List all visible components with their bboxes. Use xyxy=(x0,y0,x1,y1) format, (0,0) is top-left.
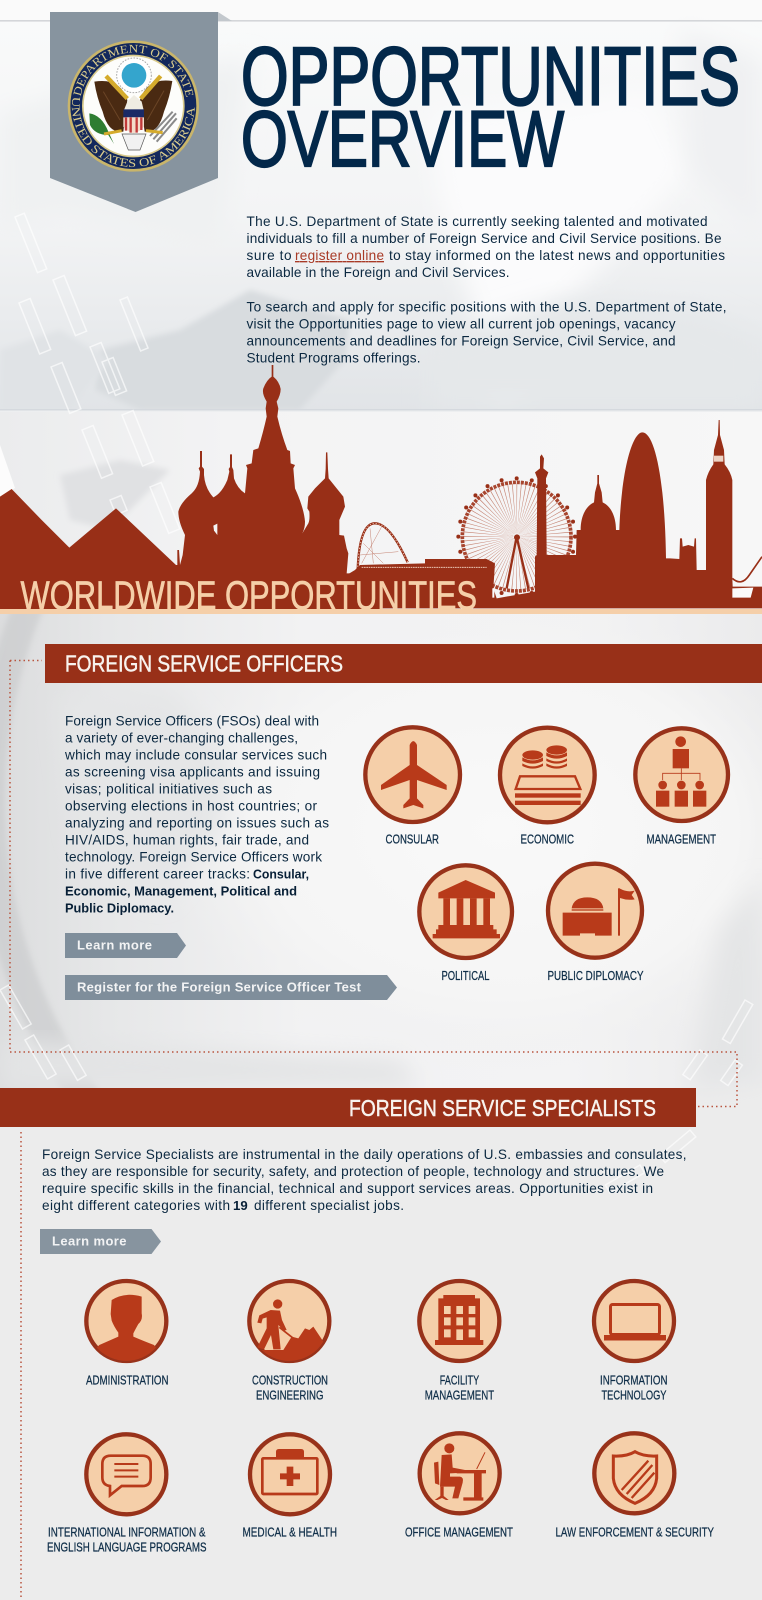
text block: officers description: visas; political initiatives such as xyxy=(65,782,272,796)
text block: officers description: Foreign Service Officers (FSOs) deal with xyxy=(65,714,319,728)
button: register for test: Register for the Foreign Service Officer Test xyxy=(77,980,362,994)
officer career track icons xyxy=(365,727,728,958)
icon: office management xyxy=(420,1433,500,1513)
background: map texture xyxy=(0,0,762,1194)
text block: officers description: a variety of ever-changing challenges, xyxy=(65,730,298,746)
specialist labels row two: INTERNATIONAL INFORMATION & xyxy=(48,1524,206,1540)
icon labels: officer tracks: ECONOMIC xyxy=(520,832,574,846)
seal: Department of State: UNITED STATES OF AMERICA xyxy=(72,97,195,168)
heading bar: specialists xyxy=(0,1088,696,1127)
text block: specialists description: different specialist jobs. xyxy=(254,1198,404,1213)
peach divider band xyxy=(0,609,762,614)
icon labels: officer tracks: PUBLIC DIPLOMACY xyxy=(548,968,644,983)
skyline illustration xyxy=(0,365,762,614)
icon: administration xyxy=(86,1281,166,1361)
text block: officers description: which may include consular services such xyxy=(64,748,327,762)
seal: Department of State: DEPARTMENT OF STATE xyxy=(73,44,194,97)
skyline: London xyxy=(340,420,762,608)
text block: introduction: individuals to fill a number of Foreign Service and Civil Service positions. Be xyxy=(246,231,722,246)
stadium arch xyxy=(358,523,408,570)
icon: public diplomacy xyxy=(548,864,642,958)
icon: international information xyxy=(86,1434,166,1514)
icon: facility management xyxy=(419,1281,499,1361)
heading: worldwide opportunities: WORLDWIDE OPPORTUNITIES xyxy=(20,574,477,618)
text block: introduction: sure to xyxy=(246,248,292,263)
icon: law enforcement and security xyxy=(594,1433,674,1513)
icon labels: officer tracks: POLITICAL xyxy=(442,968,490,983)
text block: introduction: announcements and deadlines for Foreign Service, Civil Service, and xyxy=(246,334,676,348)
icon: management xyxy=(635,728,728,821)
text block: introduction: available in the Foreign and Civil Services. xyxy=(246,265,510,280)
text block: specialists description: Foreign Service Specialists are instrumental in the daily operations of U.S. embassies and consulates, xyxy=(42,1147,686,1162)
dotted connector: specialists section xyxy=(20,1132,22,1600)
specialist labels row two: MEDICAL & HEALTH xyxy=(242,1524,337,1540)
text block: officers description: HIV/AIDS, human rights, fair trade, and xyxy=(65,832,309,848)
specialist labels row one: MANAGEMENT xyxy=(425,1388,494,1402)
text block: introduction: Student Programs offerings. xyxy=(246,350,420,366)
text block: introduction: visit the Opportunities page to view all current job openings, vacancy xyxy=(246,316,676,332)
heading bar: officers: FOREIGN SERVICE OFFICERS xyxy=(65,650,343,676)
banner with department seal xyxy=(50,12,232,212)
specialist icons row one xyxy=(86,1281,674,1361)
skyline: Moscow and pyramids xyxy=(0,365,380,610)
icon: information technology xyxy=(594,1281,674,1361)
text block: specialists description: eight different categories with xyxy=(42,1198,230,1213)
text block: introduction: register online xyxy=(295,248,384,263)
text block: officers description: Economic, Management, Political and xyxy=(65,884,297,898)
icon labels: officer tracks xyxy=(386,832,716,983)
specialist labels row one: INFORMATION xyxy=(600,1372,668,1388)
text block: officers description: observing elections in host countries; or xyxy=(65,798,317,814)
text block: officers description: as screening visa applicants and issuing xyxy=(65,764,320,780)
text block: specialists description: as they are responsible for security, safety, and protection of people, technology and structures. We xyxy=(42,1164,664,1179)
button: learn more: Learn more xyxy=(52,1234,126,1248)
panel: foreign service specialists xyxy=(0,1088,714,1554)
button: learn more xyxy=(40,1229,161,1254)
icon labels: officer tracks: CONSULAR xyxy=(386,832,439,846)
panel: foreign service officers xyxy=(45,644,762,1000)
ferris wheel xyxy=(458,478,575,595)
specialist labels row one: ENGINEERING xyxy=(256,1388,324,1402)
text block: specialists description xyxy=(42,1147,686,1213)
text block: introduction: to stay informed on the latest news and opportunities xyxy=(389,248,725,263)
specialist labels row two xyxy=(47,1524,714,1554)
button: learn more xyxy=(65,933,186,958)
text block: specialists description: require specific skills in the financial, technical and support services areas. Opportunities exist in xyxy=(42,1181,653,1196)
icon: consular xyxy=(365,727,460,822)
icon: construction engineering xyxy=(249,1281,329,1361)
text block: introduction: To search and apply for specific positions with the U.S. Department of State, xyxy=(246,300,726,314)
specialist labels row two: OFFICE MANAGEMENT xyxy=(405,1524,513,1540)
dotted connector: officers section xyxy=(10,660,737,1106)
text block: officers description: Consular, xyxy=(253,866,309,882)
text block: specialists description: 19 xyxy=(233,1198,248,1213)
icon: medical and health xyxy=(250,1434,330,1514)
icon labels: officer tracks: MANAGEMENT xyxy=(646,832,716,846)
specialist icons row two xyxy=(86,1433,674,1514)
specialist labels row one: TECHNOLOGY xyxy=(602,1388,667,1402)
specialist labels row one xyxy=(86,1372,668,1402)
heading bar: officers xyxy=(45,644,762,683)
text block: officers description: in five different career tracks: xyxy=(65,866,250,882)
specialist labels row one: ADMINISTRATION xyxy=(86,1372,168,1388)
button: learn more: Learn more xyxy=(77,938,152,952)
specialist labels row one: CONSTRUCTION xyxy=(252,1372,328,1388)
text block: introduction: The U.S. Department of State is currently seeking talented and motivated xyxy=(246,214,708,229)
icon: economic xyxy=(500,728,595,822)
heading bar: specialists: FOREIGN SERVICE SPECIALISTS xyxy=(349,1095,656,1121)
text block: officers description: analyzing and reporting on issues such as xyxy=(65,816,329,830)
icon: political xyxy=(419,865,512,958)
text block: officers description xyxy=(64,714,329,916)
specialist labels row one: FACILITY xyxy=(440,1372,479,1388)
text block: officers description: Public Diplomacy. xyxy=(65,900,174,916)
text block: officers description: technology. Foreign Service Officers work xyxy=(65,850,322,864)
title xyxy=(241,30,740,183)
title: OVERVIEW xyxy=(241,94,564,183)
button: register for test xyxy=(65,975,397,1000)
text block: introduction xyxy=(246,214,726,366)
specialist labels row two: ENGLISH LANGUAGE PROGRAMS xyxy=(47,1540,207,1554)
seal: Department of State xyxy=(68,40,199,172)
